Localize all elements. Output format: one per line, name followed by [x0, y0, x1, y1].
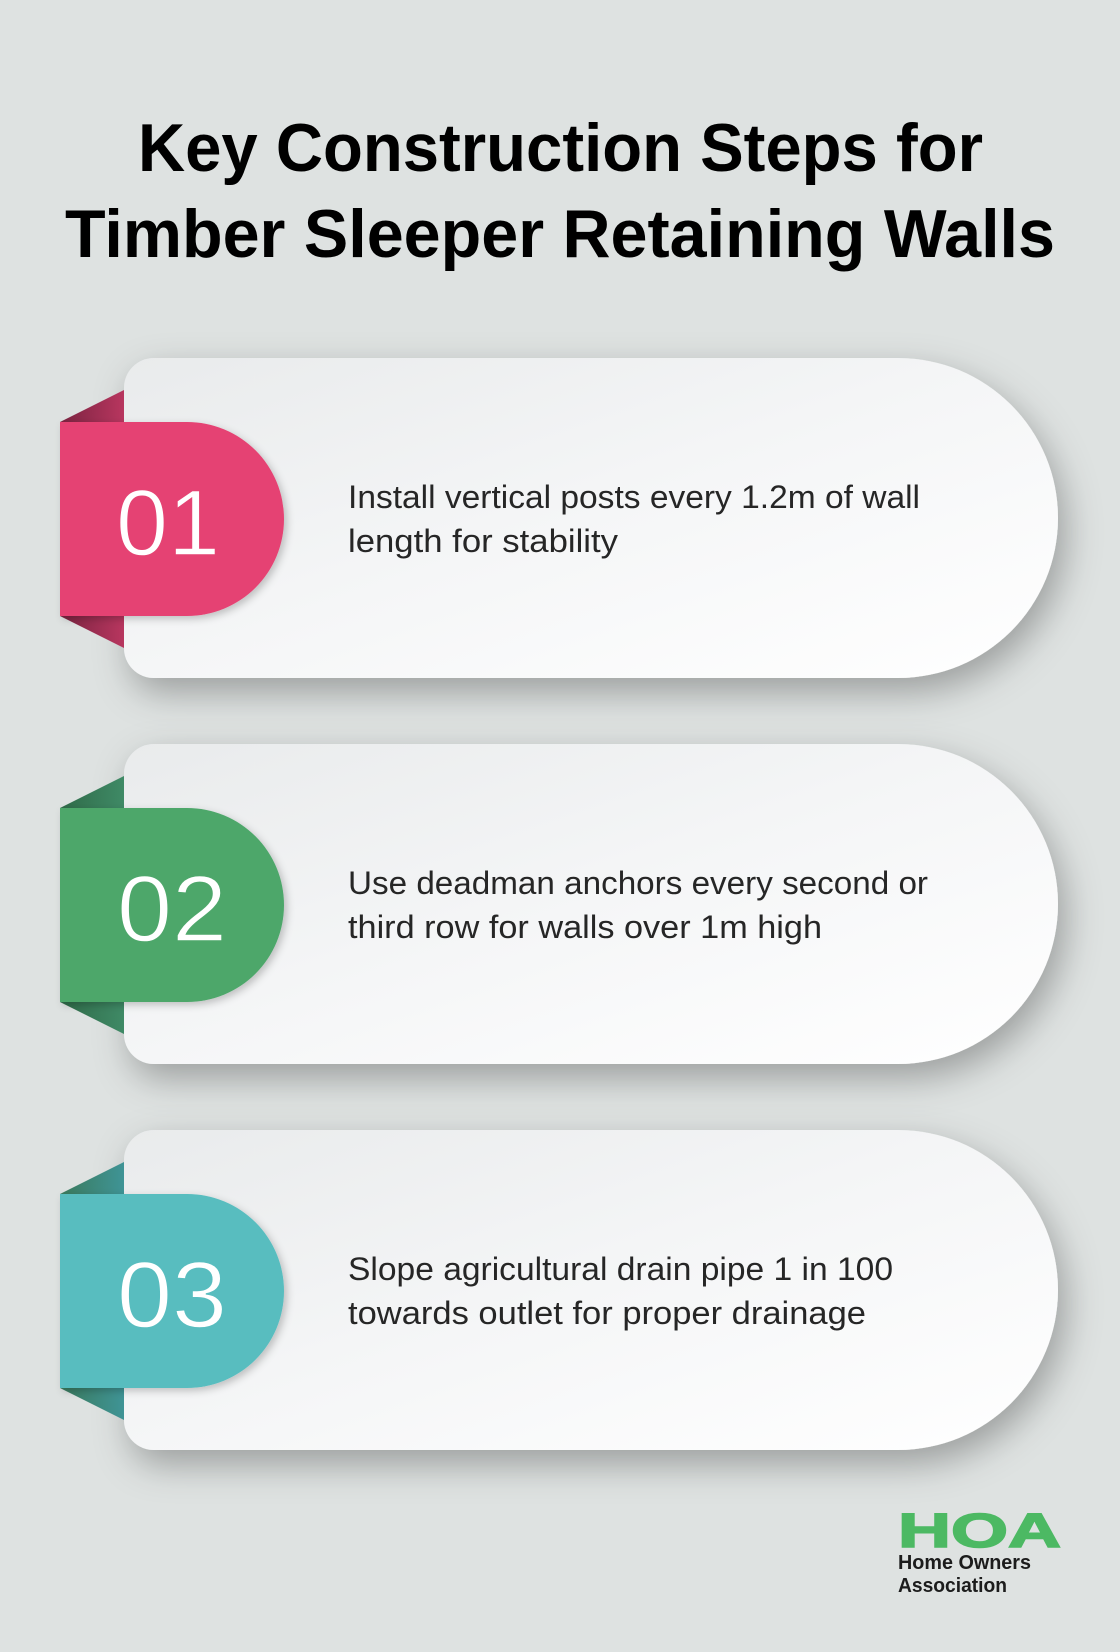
number badge 03	[60, 1194, 284, 1388]
logo: HOA Home Owners Association: Home Owners	[898, 1552, 1031, 1574]
number 02: 02	[117, 856, 227, 961]
text: step 01: length for stability	[348, 523, 618, 559]
text: step 01: Install vertical posts every 1.2m of wall	[348, 479, 920, 515]
title: Timber Sleeper Retaining Walls	[65, 196, 1055, 272]
ribbon folds 02	[60, 776, 124, 1034]
panel: step 03	[60, 1130, 1058, 1450]
number badge 02	[60, 808, 284, 1002]
text: step 02: Use deadman anchors every second or	[348, 865, 928, 901]
card background 01	[124, 358, 1058, 678]
text: step 03: towards outlet for proper drainage	[348, 1295, 866, 1331]
text: step 02: third row for walls over 1m high	[348, 909, 822, 945]
logo: HOA Home Owners Association: Association	[898, 1575, 1007, 1597]
panel: step 01	[60, 358, 1058, 678]
ribbon folds 03	[60, 1162, 124, 1420]
number badge 01	[60, 422, 284, 616]
text: step 02	[348, 865, 928, 945]
card background 03	[124, 1130, 1058, 1450]
panel: step 02	[60, 744, 1058, 1064]
card background 02	[124, 744, 1058, 1064]
number 01: 01	[116, 470, 220, 575]
title: Key Construction Steps for	[138, 110, 983, 186]
text: step 01	[348, 479, 920, 559]
logo: HOA Home Owners Association	[898, 1505, 1061, 1597]
logo: HOA Home Owners Association: HOA	[898, 1505, 1061, 1558]
number 03: 03	[117, 1242, 227, 1347]
ribbon folds 01	[60, 390, 124, 648]
title	[65, 110, 1055, 272]
text: step 03: Slope agricultural drain pipe 1 in 100	[348, 1251, 893, 1287]
text: step 03	[348, 1251, 893, 1331]
